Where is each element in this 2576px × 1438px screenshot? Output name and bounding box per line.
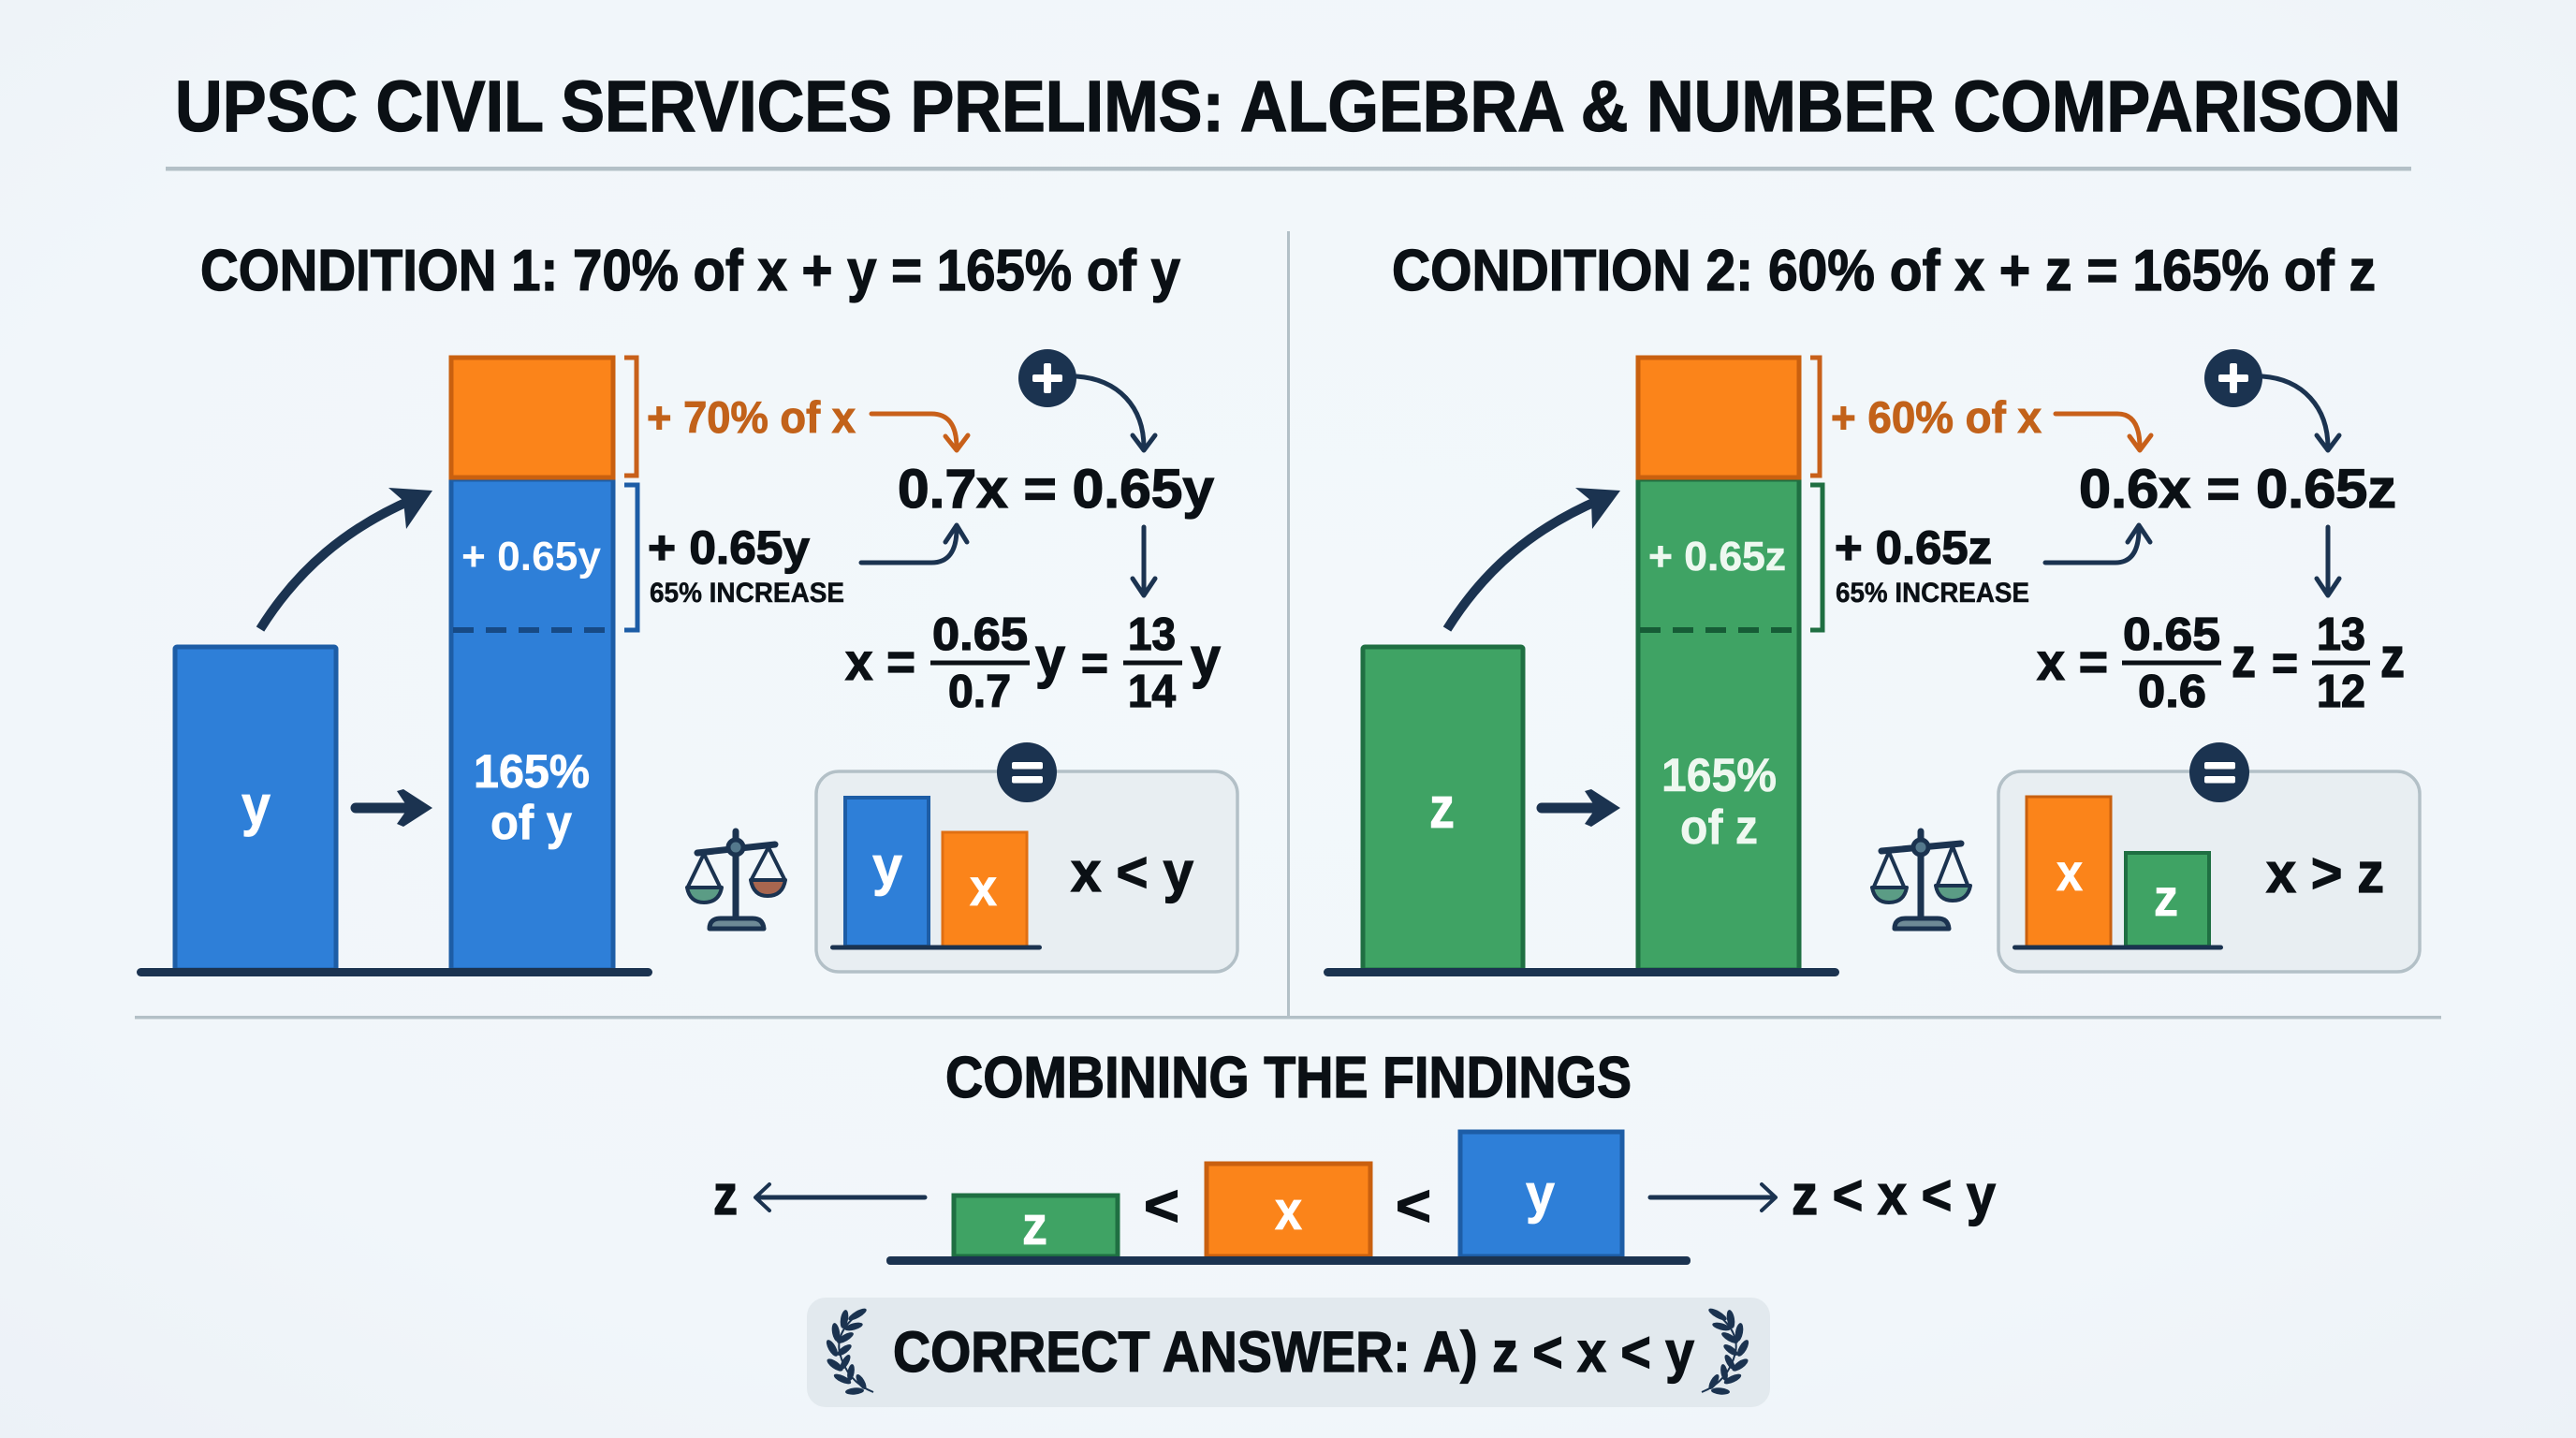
arrow: down to solution xyxy=(2317,527,2339,595)
label: +0.65y: + 0.65y xyxy=(648,521,810,574)
stacked bar: 165% of z: + 0.65z xyxy=(1648,534,1786,580)
icon: plus xyxy=(1018,349,1076,407)
stacked bar: 165% of y: 165% xyxy=(474,745,590,798)
bar: z: z xyxy=(1429,776,1455,841)
arrow: y to stacked bar xyxy=(356,789,432,827)
arrow: orange into equation xyxy=(871,414,968,450)
bar: y: y xyxy=(242,774,271,837)
equation: x = 13/12 z: 0.6 xyxy=(2138,667,2206,717)
bracket: 60% of x xyxy=(1810,358,1820,476)
stacked bar: 165% of y: + 0.65y xyxy=(461,534,602,580)
bar: mini y: y xyxy=(872,836,902,897)
heading: condition 2: CONDITION 2: 60% of x + z = 165% of z xyxy=(1392,239,2376,303)
equation: x = 13/12 z: z xyxy=(2232,626,2256,689)
bar: x xyxy=(1207,1164,1370,1256)
equation: x = 13/12 z: 0.65 xyxy=(2123,609,2220,660)
equation: 0.7x = 0.65y: 0.7x = 0.65y xyxy=(898,459,1214,520)
equation: x = 13/14 y: = xyxy=(1081,637,1108,691)
panel: condition 2 xyxy=(1324,239,2420,976)
bar: mini x: x xyxy=(2056,843,2083,902)
equation: x = 13/12 z: = xyxy=(2272,637,2298,691)
bar: mini z: z xyxy=(2154,868,2178,927)
equation: x = 13/12 z: 13 xyxy=(2317,609,2365,660)
panel: result x < y xyxy=(816,771,1237,972)
icon: left laurel xyxy=(825,1306,873,1395)
stacked bar: 165% of z xyxy=(1638,358,1799,970)
equation: x = 13/12 z: x = xyxy=(2037,632,2108,691)
bracket: 0.65y xyxy=(624,485,637,630)
answer text: CORRECT ANSWER: A) z < x < y xyxy=(893,1320,1694,1384)
icon: right laurel xyxy=(1702,1306,1750,1395)
equation: x = 13/14 y: x = xyxy=(845,632,915,691)
heading: combining the findings: COMBINING THE FINDINGS xyxy=(945,1046,1632,1110)
stacked bar: 165% of y xyxy=(451,358,613,970)
bar: z xyxy=(954,1196,1118,1256)
label: z: z xyxy=(713,1164,738,1226)
panel: result x > z xyxy=(1998,771,2420,972)
bar: z: z xyxy=(1022,1196,1047,1256)
icon: equals xyxy=(2189,742,2249,802)
bar: mini x xyxy=(2027,797,2111,946)
label: 65% increase: 65% INCREASE xyxy=(650,578,844,609)
label: z < x < y: z < x < y xyxy=(1792,1164,1997,1226)
equation: x = 13/14 y: y xyxy=(1191,626,1222,689)
bracket: 0.65z xyxy=(1810,485,1822,630)
equation: x = 13/14 y: y xyxy=(1035,626,1066,689)
arrow: left to z xyxy=(755,1184,925,1211)
baseline xyxy=(1324,968,1839,976)
arrow: plus into equation xyxy=(1076,376,1155,450)
bar: y: y xyxy=(1526,1164,1555,1225)
icon: balanced scale xyxy=(1872,831,1970,929)
equation: x = 13/14 y: 0.7 xyxy=(948,667,1011,717)
label: 65% increase: 65% INCREASE xyxy=(1836,578,2029,609)
arrow: z to stacked bar xyxy=(1542,789,1620,827)
panel: combining the findings xyxy=(713,1046,1997,1265)
panel: condition 1 xyxy=(137,239,1237,976)
equation: x = 13/14 y: 13 xyxy=(1128,609,1176,660)
icon: equals xyxy=(997,742,1057,802)
symbol: less than: < xyxy=(1144,1174,1179,1239)
equation: x = 13/12 z xyxy=(2037,609,2405,717)
equation: x = 13/12 z: 12 xyxy=(2317,667,2365,717)
equation: x = 13/14 y: 0.65 xyxy=(932,609,1028,660)
bar: y xyxy=(1460,1132,1622,1256)
arrow: growth curve xyxy=(260,488,432,629)
title: UPSC CIVIL SERVICES PRELIMS: ALGEBRA & NUMBER COMPARISON xyxy=(175,66,2401,147)
stacked bar: 165% of z: of z xyxy=(1680,800,1758,855)
equation: 0.6x = 0.65z: 0.6x = 0.65z xyxy=(2079,459,2396,520)
symbol: less than: < xyxy=(1396,1174,1431,1239)
label: +70% of x: + 70% of x xyxy=(647,392,856,442)
arrow: growth curve xyxy=(1447,488,1620,629)
stacked bar: 165% of z: 165% xyxy=(1661,749,1777,801)
arrow: navy into equation xyxy=(861,525,967,563)
arrow: down to solution xyxy=(1133,527,1155,595)
arrow: right to ordering xyxy=(1650,1184,1776,1211)
stacked bar: 165% of y: of y xyxy=(490,796,572,850)
baseline xyxy=(137,968,652,976)
heading: condition 1: CONDITION 1: 70% of x + y = 165% of y xyxy=(200,239,1180,303)
bar: x: x xyxy=(1275,1181,1302,1241)
bar: y xyxy=(175,647,336,970)
icon: tilted scale xyxy=(687,831,785,929)
result label: x < y xyxy=(1071,841,1194,903)
arrow: orange into equation xyxy=(2056,414,2151,450)
arrow: plus into equation xyxy=(2262,376,2339,450)
baseline xyxy=(886,1256,1690,1265)
callout: correct answer xyxy=(807,1298,1770,1407)
bar: z xyxy=(1363,647,1523,970)
bar: mini x: x xyxy=(970,858,997,917)
equation: x = 13/14 y: 14 xyxy=(1128,667,1176,717)
bracket: 70% of x xyxy=(624,358,637,476)
label: +0.65z: + 0.65z xyxy=(1835,521,1992,574)
bar: mini y xyxy=(845,798,929,946)
bar: mini z xyxy=(2126,853,2209,946)
result label: x > z xyxy=(2266,842,2384,904)
equation: x = 13/12 z: z xyxy=(2380,626,2405,689)
icon: plus xyxy=(2204,349,2262,407)
arrow: navy into equation xyxy=(2045,525,2150,563)
label: +60% of x: + 60% of x xyxy=(1831,392,2042,442)
bar: mini x xyxy=(943,832,1027,946)
equation: x = 13/14 y xyxy=(845,609,1222,717)
